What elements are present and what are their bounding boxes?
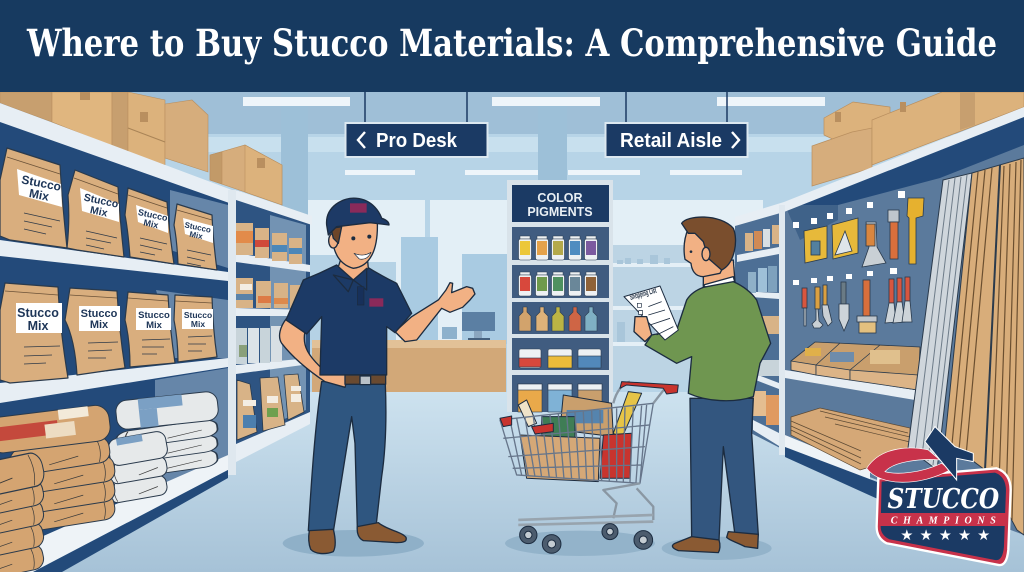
bag 1: Stucco [20,172,62,194]
bag 8: Stucco [184,310,212,320]
pegboard lower tools [793,268,912,333]
trowel mark [867,427,973,482]
panel: left shelving unit [0,103,312,572]
panel: right shelving unit [735,107,1024,535]
stacked lath panels on shelf [791,408,910,470]
hanging sign: Retail Aisle [606,92,748,157]
cement sacks stacks [0,391,219,572]
wood lath panels [945,158,1024,535]
right stock boxes [812,92,1024,186]
bag 2 [67,170,124,257]
shopping list paper [624,286,678,340]
bag 4: Stucco [184,220,212,235]
back wall and ceiling [0,92,1024,402]
logo wordmark: STUCCO [887,483,999,515]
bag 5 [0,283,68,383]
pigment jars row 2 [518,272,598,296]
pigment jars row 1 [518,236,598,260]
bag 3: Mix [143,217,159,230]
shopping cart [500,382,678,556]
staff member [280,198,475,557]
bag 6 [65,288,125,375]
cart basket wire [500,382,665,525]
service counter with monitor [312,312,506,392]
bag 2: Stucco [83,192,119,211]
bag 4: Mix [189,230,204,241]
bag 1: Mix [28,186,51,204]
cart wheels [520,524,653,553]
metal lath sheet [908,173,972,470]
hanging sign: Pro Desk [346,92,488,157]
bag 2: Mix [89,204,109,220]
bag 5: Stucco [17,306,59,320]
hanging sign: Retail Aisle: Retail Aisle [620,130,722,152]
bag 6: Mix [90,319,109,331]
stack: white sacks rear [115,391,219,479]
stack: tan sacks rear [0,404,116,534]
hanging sign: Pro Desk: Pro Desk [376,130,458,152]
cart handle [500,382,678,434]
stucco mix bags second row [0,283,217,383]
logo stars: ★★★★★ [900,527,990,544]
lower pails [518,384,602,412]
panel: color pigments display [507,180,613,412]
panel: left narrow shelf unit [236,190,312,462]
pigments header [512,185,609,222]
side shelf products [745,225,779,425]
pigments header: COLOR [537,191,583,205]
Stucco Champions logo badge [867,427,1011,565]
bag 5: Mix [28,319,48,333]
bag 3 [125,188,174,264]
floor [0,392,1024,572]
stack: tan sacks front [0,451,46,572]
logo subtitle: CHAMPIONS [891,516,996,527]
customer with shopping list [624,217,772,560]
bag 1 [0,148,67,248]
bag 4 [174,204,217,270]
bag 8 [174,295,217,362]
cart contents [518,392,642,482]
bins of tools [791,342,920,390]
bag 7: Stucco [138,310,170,321]
stack: white sacks front [107,430,169,504]
stucco mix bags top row [0,148,217,270]
pegboard tools [793,191,924,267]
bag print lines [24,213,212,364]
bag 7: Mix [146,320,163,331]
bag 3: Stucco [137,207,169,223]
shopping list paper: Shopping List [629,286,658,302]
bag 6: Stucco [81,308,118,320]
back shelving right of pigments [613,245,738,380]
pigment bottles [519,307,597,331]
paint cans [519,349,601,368]
bag 8: Mix [191,319,205,329]
left stock boxes on shelf top [0,92,282,205]
pigments header: PIGMENTS [527,205,593,219]
bag 7 [125,292,175,367]
title banner [0,0,1024,92]
